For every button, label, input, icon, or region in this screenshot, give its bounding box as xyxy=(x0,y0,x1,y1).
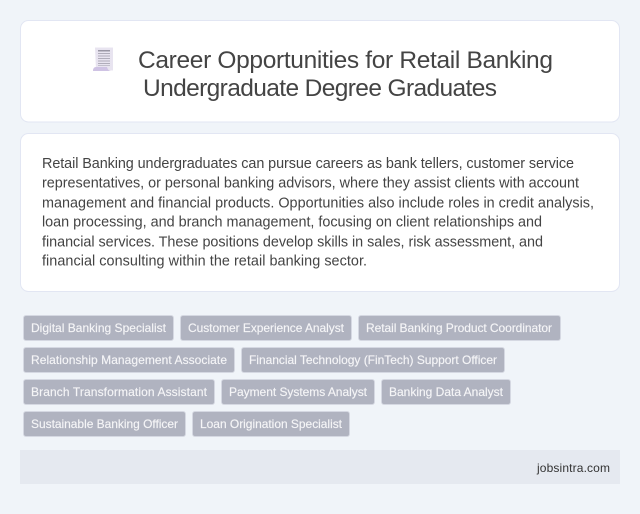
tag: Loan Origination Specialist xyxy=(192,412,350,436)
description text: management and financial products. Opportunities also include roles in credit analysis, xyxy=(42,196,594,212)
footer bar xyxy=(20,450,620,484)
panel: description xyxy=(20,134,620,292)
tag: Branch Transformation Assistant xyxy=(24,380,214,404)
tag: Digital Banking Specialist: Digital Banking Specialist xyxy=(31,321,167,335)
tag: Digital Banking Specialist xyxy=(24,316,174,340)
tag: Customer Experience Analyst xyxy=(180,316,352,340)
description text: loan processing, and branch management, focusing on client relationships and xyxy=(42,214,542,230)
tag: Relationship Management Associate: Relationship Management Associate xyxy=(31,353,227,367)
description text: Retail Banking undergraduates can pursue careers as bank tellers, customer service xyxy=(42,156,574,172)
tag: Financial Technology (FinTech) Support Officer: Financial Technology (FinTech) Support Officer xyxy=(249,353,497,367)
description text xyxy=(42,156,594,270)
tag: Financial Technology (FinTech) Support Officer xyxy=(242,348,504,372)
description text: representatives, or personal banking advisors, where they assist clients with account xyxy=(42,176,579,192)
tag: Banking Data Analyst: Banking Data Analyst xyxy=(389,385,504,399)
title line 2: Undergraduate Degree Graduates xyxy=(143,75,497,102)
footer source text: jobsintra.com xyxy=(536,461,610,475)
tag: Retail Banking Product Coordinator xyxy=(358,316,560,340)
tag: Branch Transformation Assistant: Branch Transformation Assistant xyxy=(31,385,208,399)
tag: Payment Systems Analyst xyxy=(222,380,374,404)
tag: Relationship Management Associate xyxy=(24,348,234,372)
description text: financial services. These positions develop skills in sales, risk assessment, and xyxy=(42,234,543,250)
tag: Retail Banking Product Coordinator: Retail Banking Product Coordinator xyxy=(366,321,552,335)
tag: Sustainable Banking Officer xyxy=(24,412,186,436)
tag: Loan Origination Specialist: Loan Origination Specialist xyxy=(200,417,343,431)
tag: Customer Experience Analyst: Customer Experience Analyst xyxy=(188,321,345,335)
title line 1: Career Opportunities for Retail Banking xyxy=(138,47,553,74)
tag: Sustainable Banking Officer: Sustainable Banking Officer xyxy=(31,417,178,431)
tag list: related careers xyxy=(24,316,560,436)
tag: Banking Data Analyst xyxy=(382,380,510,404)
tag: Payment Systems Analyst: Payment Systems Analyst xyxy=(229,385,368,399)
icon: paper receipt scroll xyxy=(93,48,113,71)
panel: title header xyxy=(20,20,620,122)
description text: financial consulting within the retail banking sector. xyxy=(42,254,367,270)
